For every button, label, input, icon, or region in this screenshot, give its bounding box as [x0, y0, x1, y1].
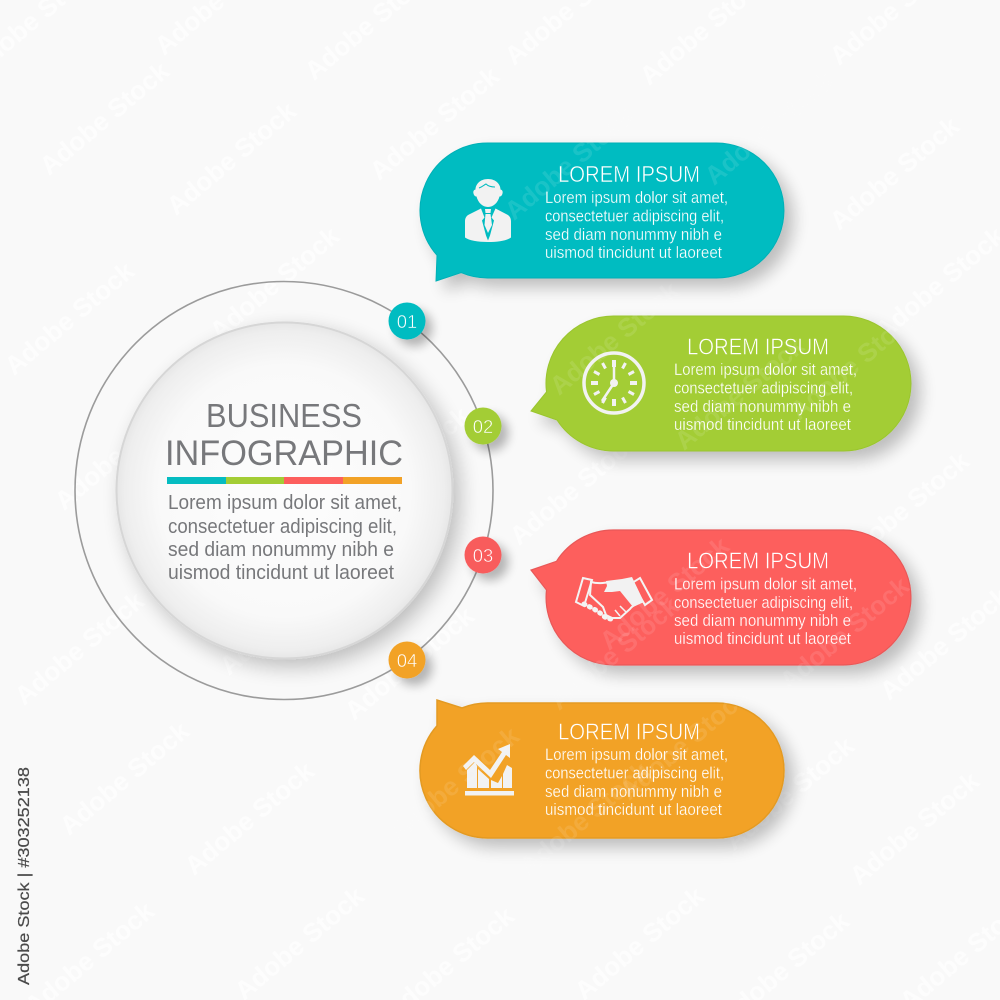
red body text: uismod tincidunt ut laoreet — [674, 630, 851, 648]
disc — [116, 322, 452, 658]
watermark pattern: Adobe Stock — [54, 715, 195, 841]
watermark overlay on bubbles: Adobe Stock — [699, 65, 840, 191]
heading: infographic: INFOGRAPHIC — [165, 434, 403, 473]
watermark pattern: Adobe Stock — [214, 555, 355, 681]
orange body text: uismod tincidunt ut laoreet — [545, 801, 722, 819]
green body text: Lorem ipsum dolor sit amet, — [674, 361, 857, 379]
icon: businessman — [465, 179, 511, 242]
watermark overlay on bubbles: Adobe Stock — [669, 330, 810, 456]
watermark pattern: Adobe Stock — [34, 55, 175, 181]
watermark pattern: Adobe Stock — [339, 600, 480, 726]
disc body text — [168, 491, 402, 584]
panel: green speech bubble — [531, 316, 911, 451]
badge 04: 04 — [397, 650, 417, 671]
orange body text: sed diam nonummy nibh e — [545, 783, 722, 801]
teal body text — [545, 189, 728, 262]
watermark pattern: Adobe Stock — [0, 255, 140, 381]
orange body text — [545, 746, 728, 819]
panel: red speech bubble — [531, 530, 911, 665]
panel: orange speech bubble — [420, 700, 784, 838]
badge 02: 02 — [473, 416, 493, 437]
badge 01: 01 — [397, 311, 417, 332]
disc body text: consectetuer adipiscing elit, — [168, 515, 397, 538]
green body text: uismod tincidunt ut laoreet — [674, 416, 851, 434]
heading: business: BUSINESS — [206, 397, 362, 434]
red body text: Lorem ipsum dolor sit amet, — [674, 576, 857, 594]
badge 03 — [464, 536, 502, 574]
disc body text: Lorem ipsum dolor sit amet, — [168, 491, 402, 514]
watermark pattern: Adobe Stock — [504, 425, 645, 551]
icon: handshake — [576, 577, 652, 619]
green bubble shape — [531, 316, 911, 451]
watermark overlay on bubbles — [384, 65, 925, 881]
central disc panel — [116, 322, 452, 658]
watermark overlay on bubbles: Adobe Stock — [544, 275, 685, 401]
orange body text: consectetuer adipiscing elit, — [545, 764, 724, 782]
green title: LOREM IPSUM — [687, 334, 829, 360]
watermark pattern: Adobe Stock — [844, 765, 985, 891]
watermark overlay on bubbles: Adobe Stock — [384, 720, 525, 846]
watermark pattern: Adobe Stock — [364, 60, 505, 186]
orange bubble shape — [420, 700, 784, 838]
watermark overlay on bubbles: Adobe Stock — [784, 300, 925, 426]
icon: growth chart — [463, 744, 514, 796]
outer ring — [75, 282, 493, 700]
red body text — [674, 576, 857, 648]
teal bubble shape — [420, 143, 784, 281]
teal body text: consectetuer adipiscing elit, — [545, 208, 724, 226]
watermark pattern: Adobe Stock — [9, 585, 150, 711]
badge 01 — [388, 302, 426, 340]
watermark overlay on bubbles: Adobe Stock — [594, 530, 735, 656]
orange title: LOREM IPSUM — [558, 718, 700, 744]
watermark pattern: Adobe Stock — [161, 95, 302, 221]
watermark pattern: Adobe Stock — [719, 730, 860, 856]
stock id label: Adobe Stock | #303252138 — [16, 767, 33, 985]
watermark pattern: Adobe Stock — [824, 110, 965, 236]
teal body text: uismod tincidunt ut laoreet — [545, 244, 722, 262]
disc body text: sed diam nonummy nibh e — [168, 538, 394, 561]
watermark overlay on bubbles: Adobe Stock — [544, 590, 685, 716]
watermark pattern: Adobe Stock — [49, 390, 190, 516]
watermark overlay on bubbles: Adobe Stock — [614, 680, 755, 806]
watermark overlay on bubbles: Adobe Stock — [514, 755, 655, 881]
teal body text: Lorem ipsum dolor sit amet, — [545, 189, 728, 207]
green body text: consectetuer adipiscing elit, — [674, 380, 853, 398]
red body text: sed diam nonummy nibh e — [674, 612, 851, 630]
badge 04 — [388, 642, 426, 678]
green body text — [674, 361, 857, 434]
red title: LOREM IPSUM — [687, 548, 829, 574]
colour bar — [167, 477, 402, 484]
watermark overlay on bubbles: Adobe Stock — [499, 100, 640, 226]
watermark pattern: Adobe Stock — [334, 400, 475, 526]
teal body text: sed diam nonummy nibh e — [545, 226, 722, 244]
badge 03: 03 — [473, 545, 493, 566]
badge 02 — [464, 408, 502, 444]
orange body text: Lorem ipsum dolor sit amet, — [545, 746, 728, 764]
watermark pattern: Adobe Stock — [179, 755, 320, 881]
icon: clock — [584, 353, 644, 413]
disc body text: uismod tincidunt ut laoreet — [168, 561, 394, 584]
red bubble shape — [531, 530, 911, 665]
green body text: sed diam nonummy nibh e — [674, 398, 851, 416]
watermark pattern: Adobe Stock — [204, 220, 345, 346]
red body text: consectetuer adipiscing elit, — [674, 594, 853, 612]
teal title: LOREM IPSUM — [558, 161, 700, 187]
watermark overlay on bubbles: Adobe Stock — [774, 570, 915, 696]
panel: teal speech bubble — [420, 143, 784, 281]
watermark pattern: Adobe Stock — [834, 445, 975, 571]
